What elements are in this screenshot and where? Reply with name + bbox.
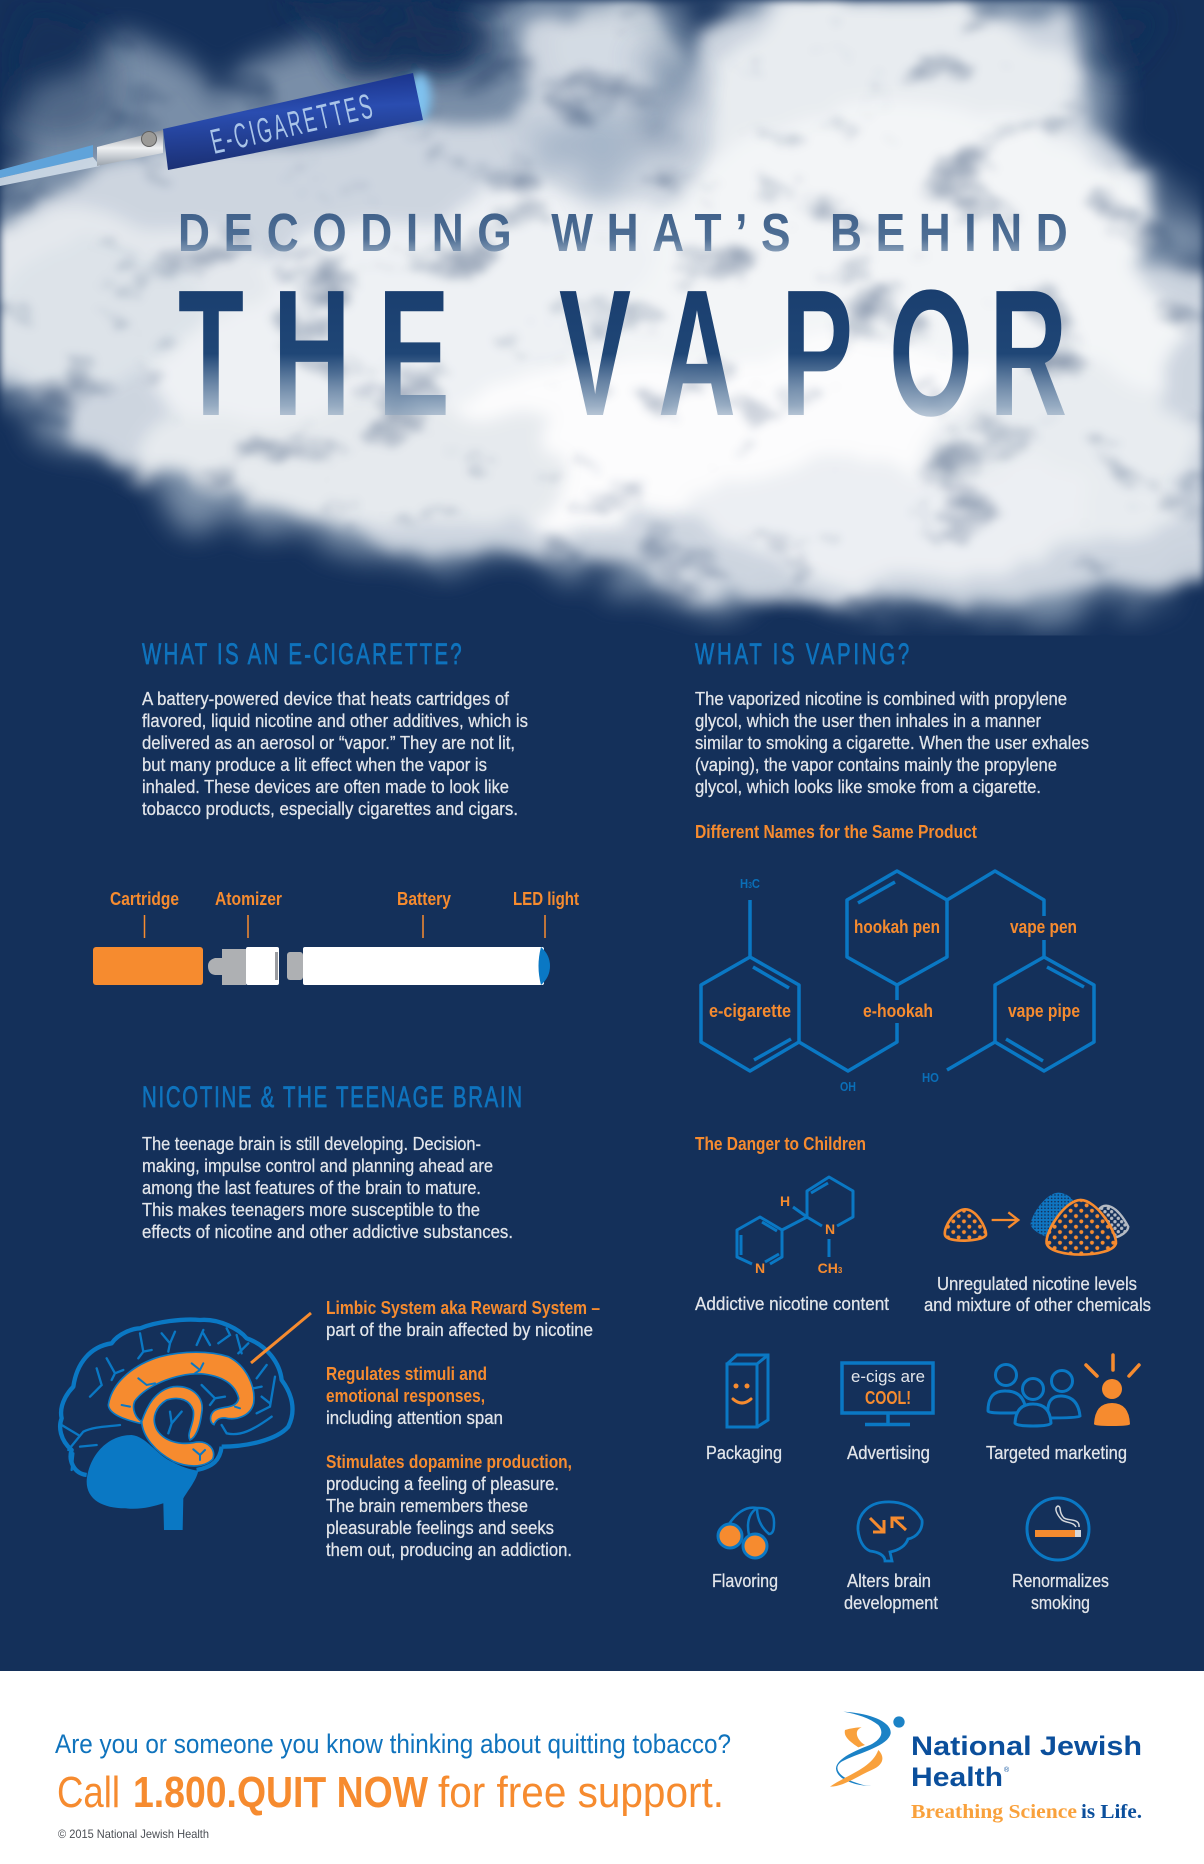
label: unregulated nicotine xyxy=(924,1273,1151,1315)
body text: A battery-powered device that heats cartridges of xyxy=(142,688,510,709)
icon: brain with arrows xyxy=(858,1502,922,1561)
body text: glycol, which the user then inhales in a manner xyxy=(695,710,1041,731)
logo tagline: is Life. xyxy=(1081,1801,1142,1823)
callout: dopamine xyxy=(326,1451,572,1560)
heading: NICOTINE & THE TEENAGE BRAIN xyxy=(142,1081,522,1114)
logo name: ® xyxy=(1004,1766,1010,1774)
callout: dopamine: Stimulates dopamine production, xyxy=(326,1451,572,1472)
hero title xyxy=(178,203,1068,454)
call to action: for free support. xyxy=(438,1768,724,1817)
body text xyxy=(142,688,528,819)
device text: E-CIGARETTES xyxy=(207,86,376,161)
cartridge xyxy=(93,947,203,985)
part labels: Cartridge xyxy=(110,888,179,909)
logo name xyxy=(911,1731,1142,1792)
icon: nicotine levels xyxy=(945,1193,1128,1255)
chemical labels: OH xyxy=(840,1079,856,1094)
callout: dopamine: them out, producing an addiction. xyxy=(326,1539,572,1560)
heading: WHAT IS VAPING? xyxy=(695,638,909,671)
product names xyxy=(709,916,1080,1021)
body text: tobacco products, especially cigarettes and cigars. xyxy=(142,798,518,819)
label: flavoring: Flavoring xyxy=(712,1570,778,1591)
logo mark xyxy=(830,1712,905,1787)
label: alters brain xyxy=(844,1570,938,1613)
body text: (vaping), the vapor contains mainly the propylene xyxy=(695,754,1057,775)
brain callouts xyxy=(326,1297,600,1560)
product names: vape pen xyxy=(1010,916,1077,937)
body text: glycol, which looks like smoke from a cigarette. xyxy=(695,776,1041,797)
body text: flavored, liquid nicotine and other additives, which is xyxy=(142,710,528,731)
label: unregulated nicotine: and mixture of other chemicals xyxy=(924,1294,1151,1315)
product names: e-hookah xyxy=(863,1000,933,1021)
brainstem and cerebellum xyxy=(87,1435,198,1530)
LED light xyxy=(538,947,550,985)
label: unregulated nicotine: Unregulated nicotine levels xyxy=(937,1273,1137,1294)
battery connector xyxy=(287,952,303,980)
label: targeted marketing: Targeted marketing xyxy=(986,1442,1127,1463)
limbic leader line xyxy=(251,1313,311,1363)
callout: dopamine: The brain remembers these xyxy=(326,1495,528,1516)
icon: nicotine molecule: N xyxy=(755,1260,765,1276)
subheading: different names: Different Names for the Same Product xyxy=(695,821,977,842)
icon: nicotine molecule xyxy=(737,1177,853,1276)
part labels: Battery xyxy=(397,888,452,909)
label: packaging: Packaging xyxy=(706,1442,782,1463)
panel: what is an e-cigarette xyxy=(142,638,528,819)
brain folds xyxy=(62,1328,275,1470)
subheading: danger to children: The Danger to Children xyxy=(695,1133,866,1154)
panel: what is vaping xyxy=(695,638,1089,797)
product names: e-cigarette xyxy=(709,1000,791,1021)
callout: regulates stimuli: Regulates stimuli and xyxy=(326,1363,487,1384)
icon: advertising monitor: COOL! xyxy=(865,1388,911,1408)
chemical labels: HO xyxy=(922,1070,939,1085)
call to action: Call xyxy=(57,1768,120,1817)
icon: nicotine molecule: H xyxy=(780,1193,790,1209)
body text: This makes teenagers more susceptible to the xyxy=(142,1199,480,1220)
icon: nicotine molecule: CH3 xyxy=(818,1260,843,1276)
title line 2: THEVAPOR xyxy=(178,254,1067,454)
product names: hookah pen xyxy=(854,916,940,937)
cartridge body xyxy=(163,73,423,170)
body text xyxy=(695,688,1089,797)
logo name: National Jewish xyxy=(911,1731,1142,1761)
body text: effects of nicotine and other addictive substances. xyxy=(142,1221,513,1242)
icon: nicotine molecule: N xyxy=(825,1221,835,1237)
battery xyxy=(303,947,544,985)
chemical labels xyxy=(740,876,939,1094)
icon: cherries xyxy=(718,1508,774,1558)
part labels xyxy=(110,888,579,938)
callout: regulates stimuli: including attention span xyxy=(326,1407,503,1428)
label: renormalizes smoking: Renormalizes xyxy=(1012,1570,1109,1591)
callout: limbic system xyxy=(326,1297,600,1340)
brain outline xyxy=(60,1320,293,1475)
footer xyxy=(0,1671,1204,1864)
label: renormalizes smoking xyxy=(1012,1570,1109,1613)
body text: making, impulse control and planning ahead are xyxy=(142,1155,493,1176)
logo tagline xyxy=(911,1801,1142,1823)
part labels: Atomizer xyxy=(215,888,282,909)
icon: packaging xyxy=(727,1355,768,1427)
metal ring xyxy=(97,130,163,166)
logo name: Health xyxy=(911,1762,1003,1792)
callout: dopamine: pleasurable feelings and seeks xyxy=(326,1517,554,1538)
label: renormalizes smoking: smoking xyxy=(1031,1592,1090,1613)
panel: nicotine and the teenage brain xyxy=(142,1081,522,1242)
icon: advertising monitor: e-cigs are xyxy=(851,1367,925,1386)
copyright: © 2015 National Jewish Health xyxy=(58,1827,209,1841)
call to action: 1.800.QUIT NOW xyxy=(133,1768,428,1817)
body text xyxy=(142,1133,513,1242)
label: advertising: Advertising xyxy=(847,1442,930,1463)
title line 1: DECODING WHAT’S BEHIND xyxy=(178,203,1068,263)
molecule bonds xyxy=(701,871,1094,1071)
body text: inhaled. These devices are often made to look like xyxy=(142,776,509,797)
logo: National Jewish Health xyxy=(830,1712,1142,1823)
heading: WHAT IS AN E-CIGARETTE? xyxy=(142,638,462,671)
callout: limbic system: Limbic System aka Reward System – xyxy=(326,1297,600,1318)
brain illustration xyxy=(60,1320,293,1530)
label: alters brain: development xyxy=(844,1592,938,1613)
body text: among the last features of the brain to mature. xyxy=(142,1177,481,1198)
part labels: LED light xyxy=(513,888,579,909)
callout: limbic system: part of the brain affected by nicotine xyxy=(326,1319,593,1340)
label: alters brain: Alters brain xyxy=(847,1570,931,1591)
footer background xyxy=(0,1671,1204,1864)
molecule diagram of product names xyxy=(701,871,1094,1094)
hero: e-cigarette device xyxy=(0,73,431,186)
body text: delivered as an aerosol or “vapor.” They are not lit, xyxy=(142,732,515,753)
callout: regulates stimuli: emotional responses, xyxy=(326,1385,485,1406)
body text: The vaporized nicotine is combined with propylene xyxy=(695,688,1067,709)
icon: cigarette in circle xyxy=(1027,1498,1089,1560)
atomizer xyxy=(208,947,279,985)
body text: similar to smoking a cigarette. When the user exhales xyxy=(695,732,1089,753)
diagram: e-cigarette parts xyxy=(93,888,579,985)
icon: advertising monitor xyxy=(842,1363,933,1424)
product names: vape pipe xyxy=(1008,1000,1080,1021)
body text: but many produce a lit effect when the vapor is xyxy=(142,754,487,775)
limbic system xyxy=(108,1352,254,1466)
hero: vapor cloud xyxy=(0,0,1204,610)
icon: targeted marketing xyxy=(988,1355,1139,1426)
limbic fold details xyxy=(122,1363,240,1460)
glow tip xyxy=(409,73,431,121)
callout: regulates stimuli xyxy=(326,1363,503,1428)
body text: The teenage brain is still developing. Decision- xyxy=(142,1133,481,1154)
callout: dopamine: producing a feeling of pleasure. xyxy=(326,1473,559,1494)
label: addictive nicotine: Addictive nicotine content xyxy=(695,1293,889,1314)
tube xyxy=(0,145,93,178)
call to action xyxy=(57,1768,724,1817)
logo tagline: Breathing Science xyxy=(911,1801,1077,1823)
quit question: Are you or someone you know thinking about quitting tobacco? xyxy=(55,1729,731,1759)
chemical labels: H3C xyxy=(740,876,761,891)
